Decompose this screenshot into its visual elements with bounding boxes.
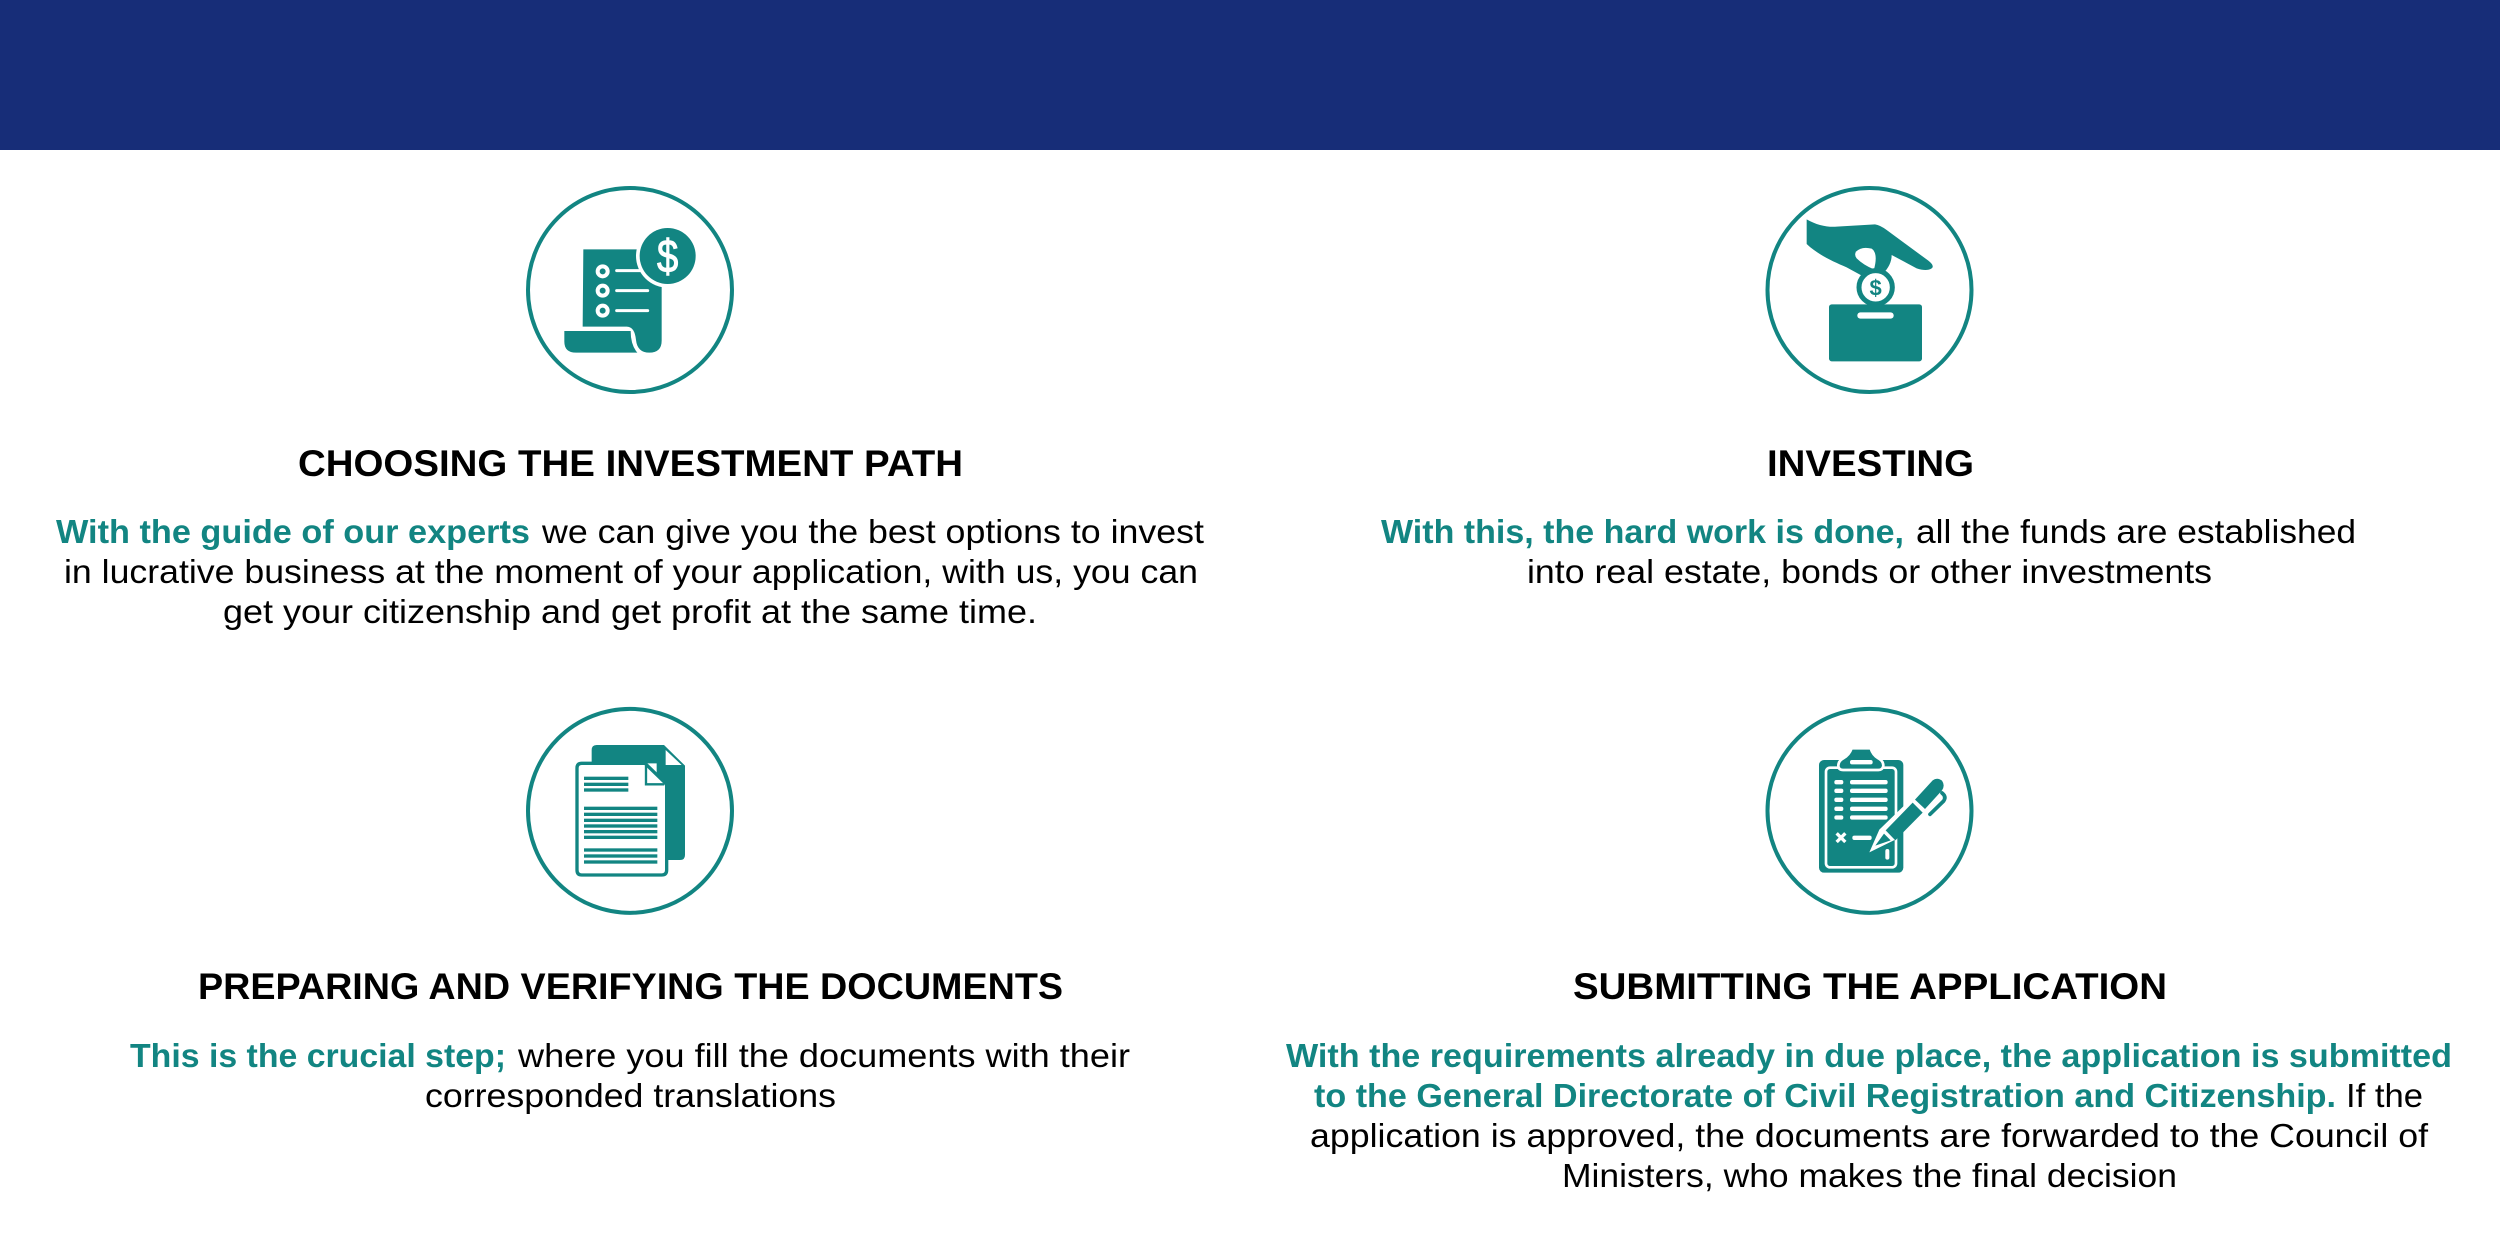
panel: investing [1381, 188, 2356, 590]
body text: Ministers, who makes the final decision [1562, 1157, 2177, 1194]
panel: preparing and verifying the documents [130, 709, 1130, 1114]
header band [0, 0, 2500, 150]
body text [1381, 513, 2356, 590]
heading: SUBMITTING THE APPLICATION [1573, 966, 2167, 1007]
body text: With the guide of our experts [56, 513, 530, 550]
body text: we can give you the best options to invest [541, 513, 1204, 550]
icon: clipboard and pen [1767, 709, 1971, 913]
body text: With this, the hard work is done, [1381, 513, 1904, 550]
body text: With the requirements already in due place, the application is submitted [1286, 1037, 2452, 1074]
panel: choosing the investment path [56, 188, 1204, 630]
icon: stacked documents [528, 709, 732, 913]
body text: all the funds are established [1916, 513, 2356, 550]
body text: in lucrative business at the moment of your application, with us, you can [64, 553, 1198, 590]
icon: investment document with dollar coin: $ [657, 230, 679, 283]
icon: hand dropping coin into box: $ [1870, 276, 1882, 301]
body text: If the [2346, 1077, 2423, 1114]
icon: investment document with dollar coin [528, 188, 732, 392]
heading: CHOOSING THE INVESTMENT PATH [298, 443, 963, 484]
body text [56, 513, 1204, 630]
body text: This is the crucial step; [130, 1037, 506, 1074]
heading: PREPARING AND VERIFYING THE DOCUMENTS [198, 966, 1063, 1007]
heading: INVESTING [1767, 443, 1974, 484]
body text [1286, 1037, 2452, 1194]
panel: submitting the application [1286, 709, 2452, 1194]
body text: to the General Directorate of Civil Registration and Citizenship. [1314, 1077, 2336, 1114]
body text: get your citizenship and get profit at the same time. [223, 593, 1037, 630]
body text: corresponded translations [425, 1077, 836, 1114]
body text: into real estate, bonds or other investments [1527, 553, 2212, 590]
body text: application is approved, the documents are forwarded to the Council of [1310, 1117, 2429, 1154]
icon: hand dropping coin into box [1767, 188, 1971, 392]
body text [130, 1037, 1130, 1114]
body text: where you fill the documents with their [517, 1037, 1130, 1074]
